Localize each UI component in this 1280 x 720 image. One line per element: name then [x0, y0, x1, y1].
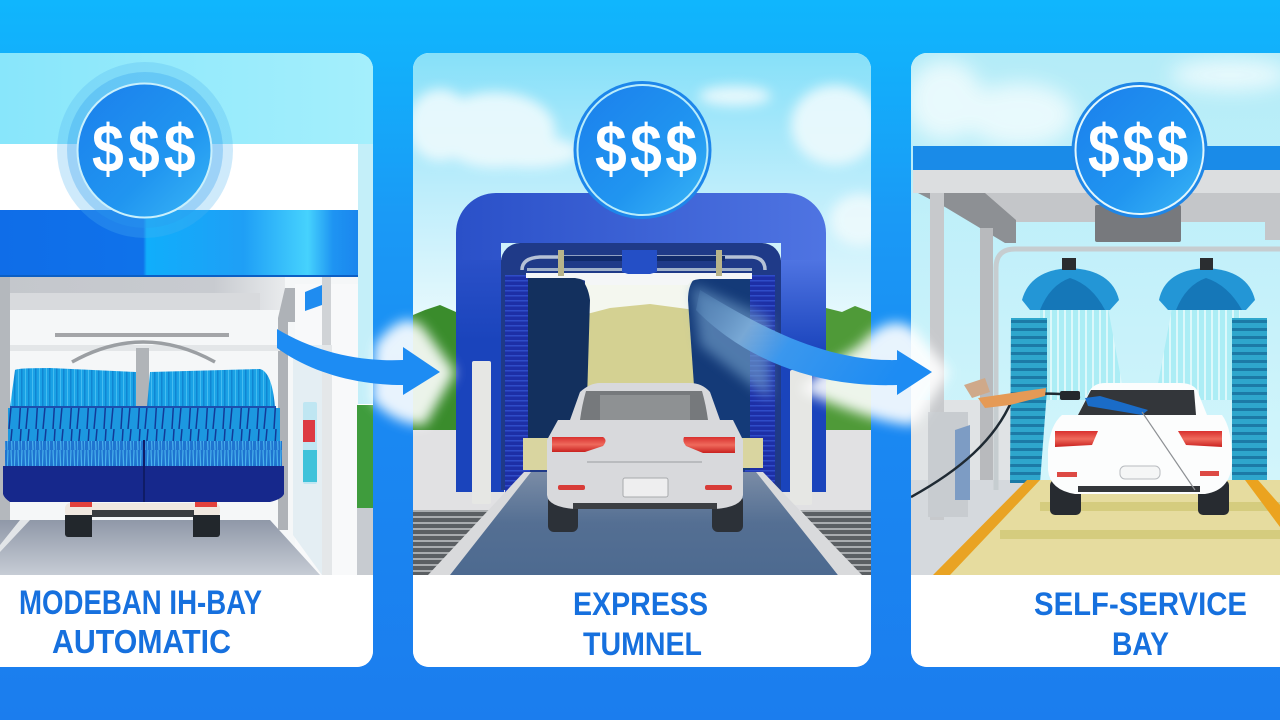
- left inner brush: [528, 278, 590, 470]
- overhead rail: [55, 333, 229, 337]
- sky: [413, 53, 871, 323]
- inner ring and coin: [578, 85, 708, 215]
- opening: [501, 243, 781, 490]
- caption background: [911, 575, 1280, 667]
- floor stripes: [1000, 502, 1280, 539]
- arrow shape: [277, 329, 440, 395]
- caption: modern in-bay automatic: AUTOMATIC: [52, 623, 231, 660]
- caption background: [413, 575, 871, 667]
- rear window: [1078, 390, 1196, 415]
- brush top plate: [526, 273, 752, 285]
- white fascia: [913, 169, 1280, 193]
- left leg panel: [472, 361, 491, 504]
- window shade: [600, 395, 690, 420]
- left road rail: [428, 472, 531, 575]
- side track left: [413, 510, 490, 575]
- left orange line: [933, 480, 1040, 575]
- blue canopy band: [913, 146, 1280, 170]
- caption: express tunnel: [573, 586, 708, 662]
- left taillight: [552, 437, 606, 452]
- left foam: [523, 438, 551, 470]
- wall sign: [303, 402, 317, 484]
- plate: [623, 478, 668, 497]
- overhead brush right: [1159, 258, 1255, 310]
- thin wand line: [1142, 412, 1195, 490]
- pipe top line: [560, 256, 725, 261]
- stripes behind brush: [10, 345, 280, 351]
- sky: [0, 53, 373, 144]
- right road rail: [756, 472, 862, 575]
- wash gantry: [456, 193, 826, 492]
- lower bumper: [1078, 486, 1200, 492]
- gun grip: [1060, 391, 1080, 400]
- inner ring and coin: [1076, 86, 1204, 214]
- garage back wall: [911, 400, 1021, 490]
- left post: [930, 193, 944, 520]
- price badge 2: [574, 81, 712, 219]
- right inner brush: [688, 278, 750, 470]
- centre pole: [136, 348, 149, 406]
- canopy brace: [918, 193, 1016, 243]
- right trees: [826, 306, 871, 432]
- spray nozzle: [978, 388, 1046, 408]
- caption: modern in-bay automatic: [19, 584, 262, 660]
- right reflector: [705, 485, 732, 490]
- right brush mount: [1200, 258, 1213, 270]
- floor left edge: [0, 520, 30, 552]
- right tyre: [193, 515, 220, 537]
- right edge haze: [358, 144, 373, 404]
- car body: [1048, 383, 1232, 494]
- tunnel back: [585, 275, 700, 315]
- white car: [1048, 383, 1232, 515]
- black hose: [911, 394, 1080, 497]
- overhead brush left: [1022, 258, 1119, 310]
- arrow shape: [696, 290, 932, 395]
- caption: modern in-bay automatic: MODEBAN IH-BAY: [19, 584, 262, 622]
- centre gantry block: [622, 250, 657, 274]
- right foam: [737, 438, 763, 468]
- coin: [78, 84, 212, 218]
- foam centre: [587, 304, 695, 392]
- plate: [1120, 466, 1160, 479]
- left taillight glimpse: [70, 502, 92, 507]
- canopy underside: [913, 193, 1280, 242]
- left column: [0, 277, 10, 532]
- left trees: [413, 305, 456, 432]
- right leg colour: [778, 260, 826, 492]
- dollar signs: $$$: [595, 111, 700, 187]
- green outside: [357, 405, 373, 508]
- right side brush: [1232, 318, 1267, 483]
- badge mount: [1095, 205, 1181, 242]
- brush assembly: [3, 368, 284, 502]
- left tyre: [65, 515, 92, 537]
- nozzle head: [964, 378, 990, 398]
- price badge 3: [1072, 82, 1208, 218]
- rear window: [580, 391, 708, 420]
- right tyre: [1198, 480, 1229, 515]
- panel: self-service bay: [907, 53, 1280, 667]
- right column: [278, 288, 295, 530]
- halo ring: [67, 72, 223, 228]
- right brush shade: [1176, 278, 1242, 310]
- right taillight: [683, 437, 735, 453]
- car body: [547, 383, 743, 509]
- bay interior: [10, 277, 358, 547]
- blue roof band: [0, 210, 358, 276]
- water curtain left: [1040, 308, 1125, 400]
- caption: express tunnel: TUMNEL: [583, 626, 702, 662]
- lower bumper: [573, 503, 717, 509]
- pipe lower line: [527, 268, 752, 271]
- lower header strip: [10, 293, 230, 310]
- right leg panel: [790, 370, 812, 505]
- back wall: [413, 430, 871, 510]
- right reflector: [1200, 471, 1219, 476]
- caption: self-service bay: [1034, 586, 1247, 662]
- panel: express tunnel: [408, 53, 890, 667]
- trunk crease: [587, 461, 702, 463]
- clouds: [907, 59, 1280, 147]
- left reflector: [1057, 472, 1077, 477]
- overhead pipes: [522, 257, 765, 270]
- caption: express tunnel: EXPRESS: [573, 586, 708, 622]
- white fascia: [0, 144, 358, 210]
- dollar signs: $$$: [92, 111, 200, 187]
- left tyre: [548, 495, 578, 532]
- left brush mount: [1062, 258, 1076, 270]
- clouds: [408, 85, 890, 246]
- floor: [0, 520, 320, 575]
- right taillight: [1178, 431, 1222, 447]
- grey header beam: [0, 277, 285, 310]
- roof shadow line: [0, 275, 358, 277]
- white wall: [295, 284, 358, 575]
- left outer brush: [505, 275, 530, 495]
- left leg colour: [456, 260, 504, 492]
- caption: self-service bay: BAY: [1112, 626, 1169, 662]
- left tyre: [1050, 480, 1081, 515]
- pay station: [928, 412, 968, 517]
- arrow: tunnel to self-service: [696, 290, 950, 425]
- navy skirt: [3, 466, 284, 502]
- arrow: in-bay to tunnel: [277, 320, 455, 425]
- red sign block: [303, 420, 315, 442]
- panel: modern in-bay automatic: [0, 53, 373, 667]
- left reflector: [558, 485, 585, 490]
- blue wand on window: [1085, 396, 1148, 415]
- water curtain right: [1155, 308, 1240, 400]
- blue flag: [305, 285, 322, 311]
- lower brush row: [5, 441, 282, 466]
- caption: self-service bay: SELF-SERVICE: [1034, 586, 1247, 622]
- cyan sign block: [303, 450, 317, 482]
- right orange line: [1245, 480, 1280, 527]
- right outer brush: [745, 275, 775, 495]
- dollar signs: $$$: [1088, 111, 1191, 187]
- white car: [523, 383, 763, 532]
- left side brush: [1010, 318, 1047, 483]
- outside ground: [357, 508, 373, 575]
- left brush shade: [1040, 278, 1105, 310]
- right tyre: [712, 495, 743, 532]
- middle brush row: [8, 408, 280, 441]
- right top brush: [147, 369, 275, 407]
- centre seam: [143, 440, 145, 502]
- door edge: [322, 345, 332, 575]
- brush support arch: [72, 342, 215, 362]
- yellow wash floor: [940, 480, 1280, 575]
- door panel: [293, 345, 322, 575]
- sky: [911, 53, 1280, 575]
- car rear under brush: [65, 502, 220, 537]
- road: [448, 472, 838, 575]
- caption background: [0, 575, 373, 667]
- overhead arch: [996, 249, 1280, 490]
- second post: [980, 228, 993, 480]
- dark seam: [10, 406, 276, 408]
- right nozzle: [716, 250, 722, 276]
- price badge 1 with halo: [57, 62, 233, 238]
- side track right: [800, 510, 871, 575]
- right taillight glimpse: [195, 502, 217, 507]
- spray over right brush: [692, 285, 770, 400]
- blue handle on station: [955, 425, 970, 500]
- ground grey: [911, 480, 1030, 575]
- bumper: [92, 510, 194, 517]
- wall post: [322, 277, 331, 345]
- left taillight: [1055, 431, 1098, 447]
- left nozzle: [558, 250, 564, 276]
